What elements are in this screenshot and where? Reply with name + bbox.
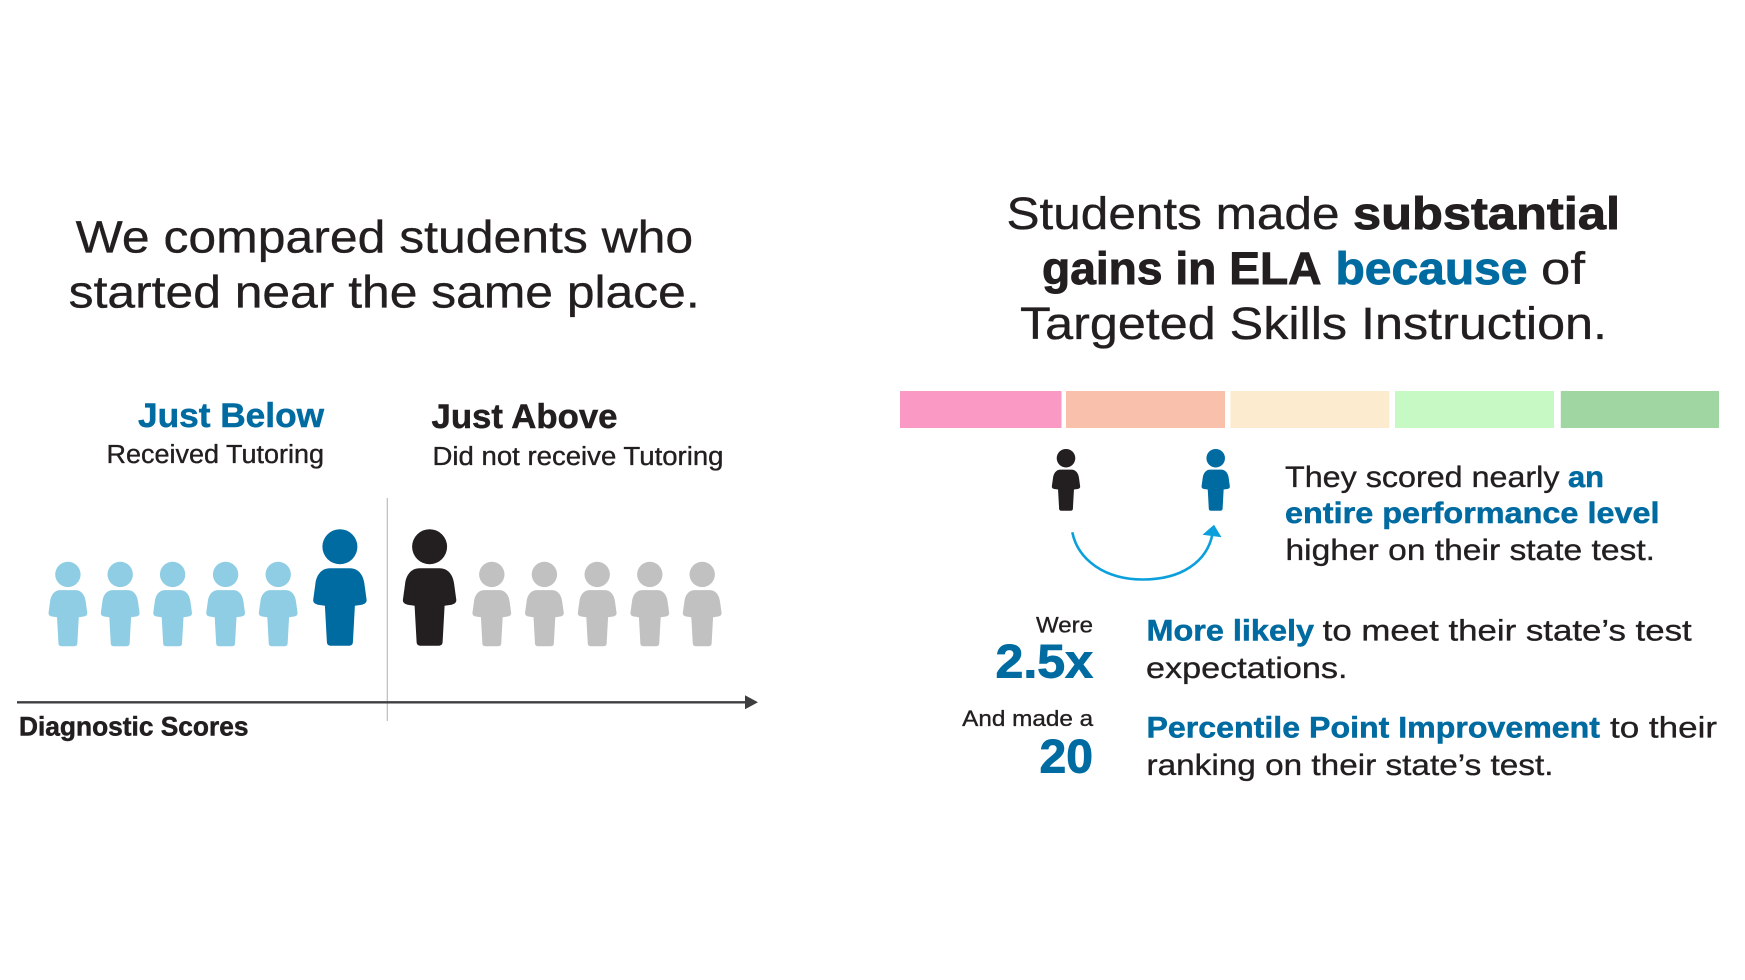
- people: just below group: [49, 562, 298, 646]
- icon: large blue student: [313, 529, 367, 646]
- text: entire performance level: They scored nearly: [1285, 461, 1560, 494]
- stat: 20: And made a: [962, 706, 1094, 731]
- icon: blue student small: [1202, 449, 1230, 511]
- stat text: more likely: to meet their state’s test: [1323, 614, 1692, 648]
- stat text: percentile point improvement: ranking on their state’s test.: [1146, 749, 1554, 782]
- heading: we compared students: [69, 212, 700, 317]
- heading: we compared students: We compared students who: [76, 212, 693, 263]
- stat: 2.5x: Were: [1036, 613, 1093, 638]
- cutoff line: [386, 498, 388, 721]
- panel: left comparison: [17, 212, 758, 741]
- heading: substantial gains: of: [1541, 243, 1585, 294]
- icon: large black student: [403, 529, 456, 646]
- axis label: Diagnostic Scores: [19, 712, 248, 742]
- stat: 20: 20: [1040, 731, 1093, 784]
- heading: substantial gains: Students made: [1006, 188, 1340, 239]
- heading: substantial gains: gains in ELA: [1042, 243, 1322, 294]
- arrow: curved growth arrow: [1072, 525, 1222, 580]
- label: just below: [106, 397, 324, 469]
- text: entire performance level: entire performance level: [1285, 497, 1660, 530]
- people: just above group: [472, 562, 722, 646]
- stat text: more likely: [1146, 614, 1692, 685]
- heading: substantial gains: [1006, 188, 1620, 349]
- text: entire performance level: [1285, 461, 1660, 567]
- text: entire performance level: higher on their state test.: [1286, 534, 1655, 567]
- heading: substantial gains: substantial: [1353, 188, 1620, 239]
- stat text: more likely: More likely: [1146, 614, 1314, 648]
- stat text: more likely: expectations.: [1146, 652, 1348, 685]
- heading: substantial gains: Targeted Skills Instruction.: [1020, 298, 1607, 349]
- performance level bar: [900, 391, 1719, 428]
- arrow: diagnostic score axis: [17, 695, 758, 709]
- label: just above: Did not receive Tutoring: [432, 443, 724, 471]
- heading: we compared students: started near the same place.: [69, 266, 700, 317]
- stat text: percentile point improvement: to their: [1610, 712, 1717, 745]
- label: just below: Received Tutoring: [106, 441, 324, 469]
- label: just above: Just Above: [432, 398, 618, 436]
- label: just above: [432, 398, 724, 471]
- heading: substantial gains: because: [1336, 243, 1528, 294]
- stat: 20: [962, 706, 1094, 784]
- icon: black student small: [1052, 449, 1080, 511]
- stat: 2.5x: 2.5x: [996, 635, 1094, 688]
- stat text: percentile point improvement: [1146, 712, 1717, 782]
- label: just below: Just Below: [138, 397, 324, 435]
- stat: 2.5x: [996, 613, 1094, 688]
- stat text: percentile point improvement: Percentile Point Improvement: [1146, 712, 1600, 745]
- panel: right results: [900, 188, 1719, 784]
- text: entire performance level: an: [1568, 461, 1604, 494]
